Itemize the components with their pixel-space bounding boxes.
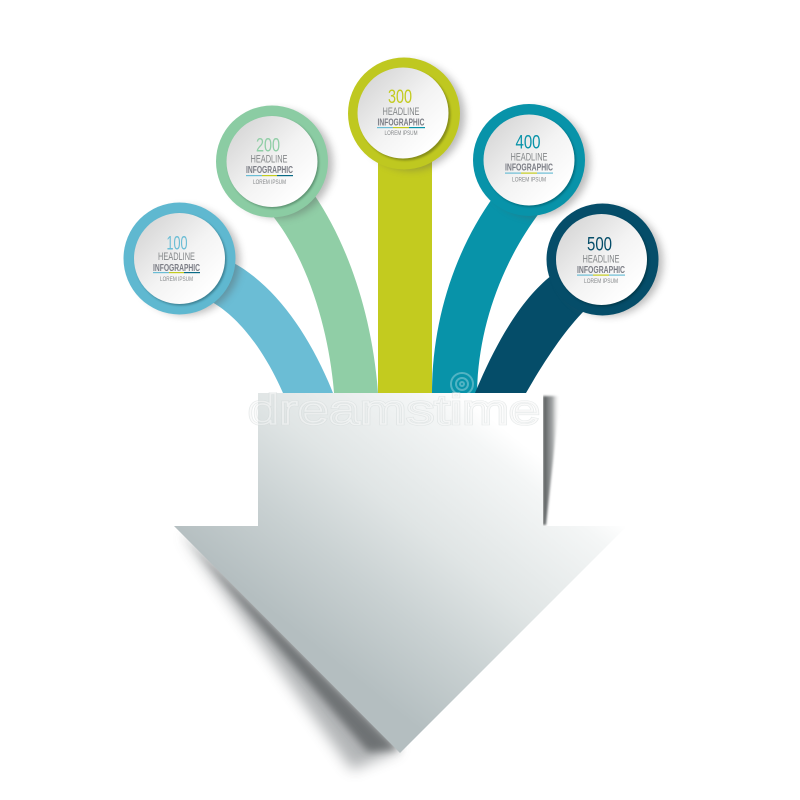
circle: 500 <box>546 204 663 316</box>
circle: 300 <box>348 58 465 170</box>
circle: 100: 100 <box>166 234 188 254</box>
circle: 500: LOREM IPSUM <box>584 278 618 285</box>
ribbon: 200 green <box>272 196 378 393</box>
circle: 400: LOREM IPSUM <box>512 177 546 184</box>
arrow shadow: lower left <box>180 532 400 770</box>
circle: 200 <box>216 106 333 218</box>
circle: 400 <box>473 104 590 217</box>
watermark text: dreamstime <box>248 386 540 433</box>
circle: 200: LOREM IPSUM <box>253 179 286 186</box>
circle: 400: 400 <box>516 132 540 154</box>
big down arrow <box>174 393 627 753</box>
circle: 300: LOREM IPSUM <box>384 130 418 137</box>
circle: 500: 500 <box>587 235 612 256</box>
circle: 100 <box>124 202 240 315</box>
circle: 100: INFOGRAPHIC <box>153 262 200 274</box>
watermark spiral icon <box>451 373 473 395</box>
circle: 400: HEADLINE <box>510 152 548 164</box>
circle: 200: 200 <box>256 136 280 156</box>
circle: 200: HEADLINE <box>250 154 288 166</box>
ribbon: 100 blue <box>212 262 333 393</box>
circle: 300: HEADLINE <box>382 106 420 118</box>
circle: 100: LOREM IPSUM <box>160 276 193 283</box>
circle: 500: INFOGRAPHIC <box>577 264 625 276</box>
circle: 400: INFOGRAPHIC <box>505 162 553 174</box>
ribbon: 400 teal <box>432 196 540 393</box>
arrow shadow: right of shaft <box>543 396 560 525</box>
watermark text: dreamstime <box>248 386 540 433</box>
circle: 100: HEADLINE <box>158 251 195 263</box>
ribbon: 300 lime <box>378 150 432 393</box>
ribbon: 500 navy <box>475 275 585 393</box>
circle: 300: INFOGRAPHIC <box>378 116 425 128</box>
circle: 500: HEADLINE <box>582 254 620 266</box>
circle: 300: 300 <box>388 87 412 108</box>
circle: 200: INFOGRAPHIC <box>246 164 293 176</box>
